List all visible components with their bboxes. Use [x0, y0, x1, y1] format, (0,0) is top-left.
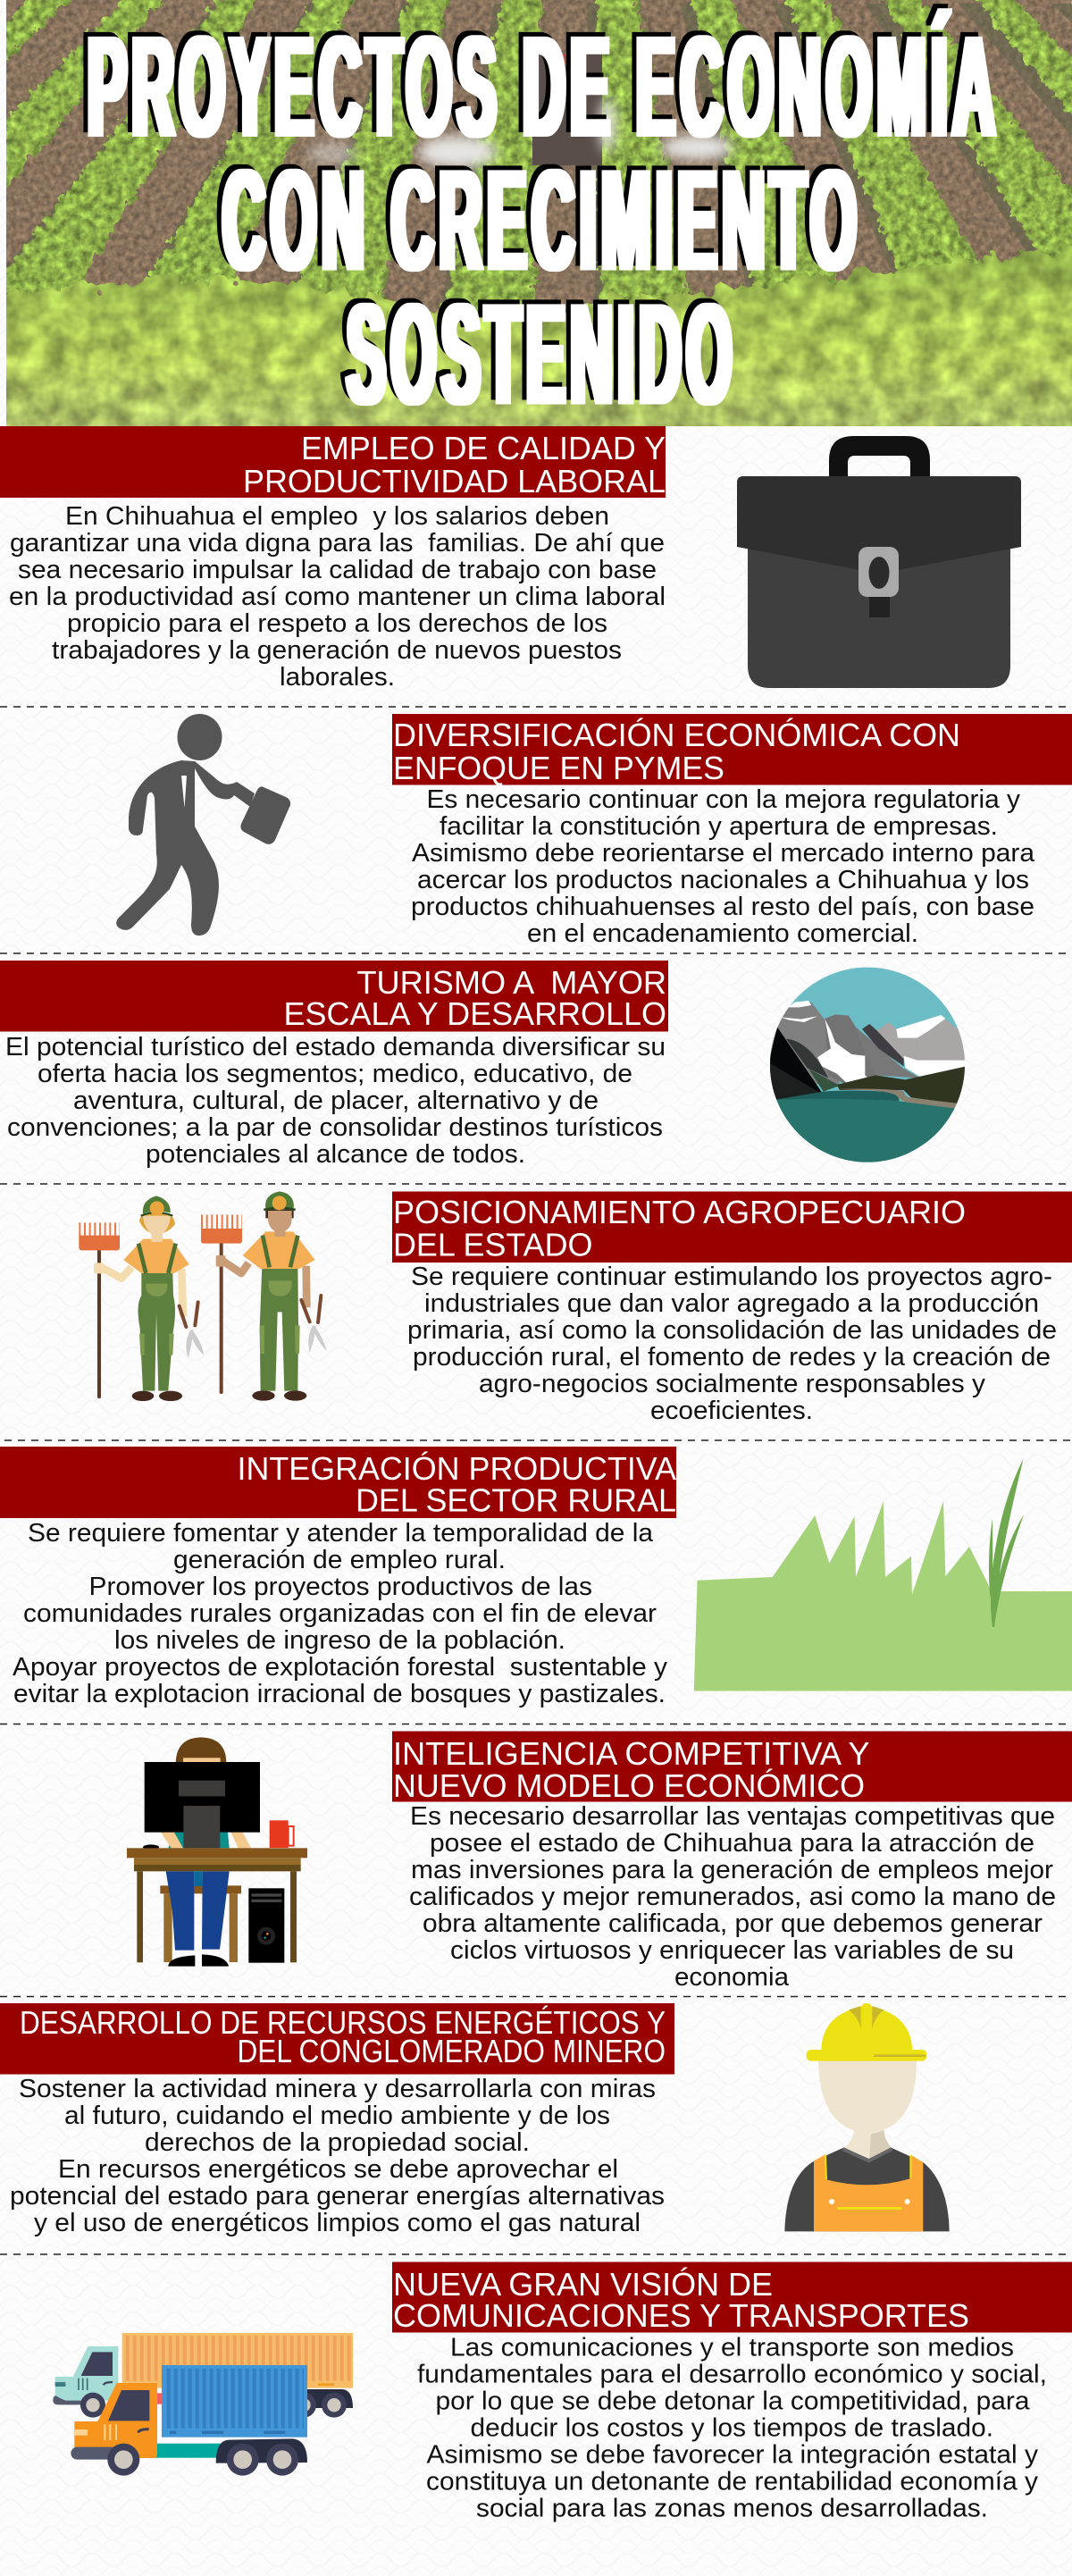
- icon: worker with yellow helmet: [784, 2003, 950, 2231]
- text block: comunicaciones y transportes: [417, 2334, 1047, 2523]
- text block: recursos energéticos y minero: [10, 2075, 665, 2237]
- text block: diversificación económica: acercar los productos nacionales a Chihuahua y los: [417, 866, 1029, 894]
- panel: comunicaciones y transportes: [53, 2262, 1072, 2523]
- text block: inteligencia competitiva: economia: [674, 1963, 790, 1992]
- text block: empleo de calidad: propicio para el respeto a los derechos de los: [67, 609, 607, 638]
- heading: comunicaciones y transportes: [392, 2262, 1072, 2334]
- text block: empleo de calidad: garantizar una vida digna para las familias. De ahí que: [10, 529, 665, 558]
- panel: recursos energéticos y minero: [0, 2003, 950, 2237]
- icon: briefcase: [737, 436, 1021, 688]
- icon: two container trucks: [53, 2333, 353, 2476]
- heading: empleo de calidad: EMPLEO DE CALIDAD Y: [301, 430, 666, 466]
- heading: comunicaciones y transportes: NUEVA GRAN VISIÓN DE: [393, 2266, 773, 2303]
- text block: empleo de calidad: laborales.: [280, 663, 395, 692]
- text block: recursos energéticos y minero: En recursos energéticos se debe aprovechar el: [58, 2155, 618, 2184]
- icon: person at computer desk: [127, 1737, 307, 1967]
- panel: empleo de calidad: [0, 426, 1021, 692]
- text block: diversificación económica: facilitar la constitución y apertura de empresas.: [440, 812, 998, 841]
- panel: turismo: [0, 961, 971, 1169]
- text block: integración productiva: los niveles de ingreso de la población.: [114, 1626, 565, 1655]
- text block: inteligencia competitiva: mas inversiones para la generación de empleos mejor: [411, 1856, 1053, 1884]
- text block: integración productiva: Apoyar proyectos de explotación forestal sustentable y: [13, 1653, 668, 1682]
- text block: posicionamiento agropecuario: ecoeficientes.: [650, 1397, 813, 1425]
- text block: integración productiva: Promover los proyectos productivos de las: [89, 1573, 592, 1601]
- text block: inteligencia competitiva: obra altamente calificada, por que debemos generar: [423, 1909, 1043, 1938]
- text block: integración productiva: [13, 1519, 668, 1708]
- header photo: vineyard rows with tractor spraying: [0, 0, 1072, 447]
- text block: turismo: convenciones; a la par de consolidar destinos turísticos: [7, 1113, 663, 1142]
- text block: integración productiva: Se requiere fomentar y atender la temporalidad de la: [28, 1519, 654, 1548]
- panel: integración productiva: [0, 1447, 1072, 1708]
- text block: comunicaciones y transportes: fundamentales para el desarrollo económico y social,: [417, 2361, 1047, 2389]
- text block: inteligencia competitiva: [409, 1802, 1056, 1992]
- heading: integración productiva: [0, 1447, 676, 1519]
- heading: recursos energéticos y minero: [0, 2003, 674, 2075]
- heading: turismo: ESCALA Y DESARROLLO: [284, 995, 666, 1032]
- text block: turismo: potenciales al alcance de todos.: [146, 1140, 525, 1169]
- heading: diversificación económica: ENFOQUE EN PYMES: [393, 750, 724, 786]
- text block: empleo de calidad: [9, 502, 666, 692]
- panel: diversificación económica: [116, 714, 1072, 948]
- text block: empleo de calidad: En Chihuahua el empleo y los salarios deben: [65, 502, 609, 531]
- text block: integración productiva: comunidades rurales organizadas con el fin de elevar: [23, 1599, 657, 1628]
- icon: two farmers with rakes and shears: [79, 1191, 327, 1401]
- text block: comunicaciones y transportes: Asimismo se debe favorecer la integración estatal y: [427, 2441, 1039, 2470]
- text block: diversificación económica: Es necesario continuar con la mejora regulatoria y: [427, 785, 1021, 814]
- heading: integración productiva: DEL SECTOR RURAL: [356, 1481, 676, 1519]
- text block: diversificación económica: productos chihuahuenses al resto del país, con base: [411, 893, 1034, 921]
- title: [88, 6, 1001, 434]
- text block: recursos energéticos y minero: al futuro, cuidando el medio ambiente y de los: [64, 2102, 610, 2130]
- text block: turismo: El potencial turístico del estado demanda diversificar su: [5, 1033, 666, 1061]
- text block: turismo: aventura, cultural, de placer, alternativo y de: [73, 1087, 599, 1115]
- text block: comunicaciones y transportes: social para las zonas menos desarrolladas.: [476, 2495, 988, 2523]
- text block: inteligencia competitiva: Es necesario desarrollar las ventajas competitivas que: [410, 1802, 1055, 1831]
- text block: diversificación económica: en el encadenamiento comercial.: [527, 919, 918, 948]
- icon: mountain lake circle: [766, 965, 971, 1168]
- heading: turismo: TURISMO A MAYOR: [357, 964, 666, 1001]
- text block: comunicaciones y transportes: Las comunicaciones y el transporte son medios: [450, 2334, 1014, 2362]
- text block: recursos energéticos y minero: derechos de la propiedad social.: [145, 2128, 530, 2157]
- text block: turismo: oferta hacia los segmentos; medico, educativo, de: [38, 1060, 632, 1088]
- heading: inteligencia competitiva: NUEVO MODELO ECONÓMICO: [393, 1767, 865, 1804]
- heading: inteligencia competitiva: INTELIGENCIA COMPETITIVA Y: [393, 1735, 870, 1772]
- text block: empleo de calidad: sea necesario impulsar la calidad de trabajo con base: [18, 556, 657, 584]
- panel: posicionamiento agropecuario: [79, 1191, 1072, 1425]
- heading: recursos energéticos y minero: DEL CONGLOMERADO MINERO: [238, 2033, 666, 2069]
- heading: turismo: [0, 961, 668, 1032]
- text block: posicionamiento agropecuario: producción rural, el fomento de redes y la creación de: [413, 1343, 1051, 1372]
- heading: posicionamiento agropecuario: DEL ESTADO: [393, 1226, 593, 1263]
- heading: empleo de calidad: [0, 426, 666, 499]
- text block: integración productiva: generación de empleo rural.: [173, 1546, 506, 1574]
- text block: recursos energéticos y minero: potencial del estado para generar energías alternativas: [10, 2182, 665, 2211]
- heading: comunicaciones y transportes: COMUNICACIONES Y TRANSPORTES: [393, 2297, 969, 2334]
- text block: posicionamiento agropecuario: Se requiere continuar estimulando los proyectos agro-: [411, 1263, 1052, 1291]
- icon: walking businessman: [116, 714, 290, 936]
- text block: comunicaciones y transportes: deducir los costos y los tiempos de traslado.: [470, 2414, 993, 2443]
- text block: inteligencia competitiva: ciclos virtuosos y enriquecer las variables de su: [450, 1936, 1014, 1965]
- text block: integración productiva: evitar la explotacion irracional de bosques y pastizales.: [13, 1680, 666, 1708]
- text block: empleo de calidad: en la productividad así como mantener un clima laboral: [9, 583, 666, 611]
- text block: posicionamiento agropecuario: primaria, así como la consolidación de las unidades de: [407, 1316, 1057, 1345]
- heading: recursos energéticos y minero: DESARROLLO DE RECURSOS ENERGÉTICOS Y: [20, 2004, 666, 2041]
- text block: recursos energéticos y minero: Sostener la actividad minera y desarrollarla con miras: [19, 2075, 656, 2103]
- heading: diversificación económica: [392, 714, 1072, 786]
- heading: empleo de calidad: PRODUCTIVIDAD LABORAL: [243, 463, 666, 499]
- text block: comunicaciones y transportes: por lo que se debe detonar la competitividad, para: [436, 2387, 1030, 2416]
- text block: inteligencia competitiva: posee el estado de Chihuahua para la atracción de: [430, 1829, 1034, 1858]
- heading: diversificación económica: DIVERSIFICACIÓN ECONÓMICA CON: [393, 717, 960, 753]
- text block: posicionamiento agropecuario: agro-negocios socialmente responsables y: [479, 1370, 986, 1398]
- text block: diversificación económica: [411, 785, 1035, 948]
- heading: posicionamiento agropecuario: [392, 1192, 1072, 1263]
- panel: inteligencia competitiva: [127, 1732, 1072, 1992]
- text block: posicionamiento agropecuario: industriales que dan valor agregado a la producción: [424, 1289, 1039, 1318]
- text block: inteligencia competitiva: calificados y mejor remunerados, asi como la mano de: [409, 1883, 1056, 1911]
- text block: recursos energéticos y minero: y el uso de energéticos limpios como el gas natural: [34, 2209, 641, 2237]
- text block: comunicaciones y transportes: constituya un detonante de rentabilidad economía y: [426, 2468, 1039, 2496]
- icon: grass: [694, 1459, 1072, 1691]
- text block: empleo de calidad: trabajadores y la generación de nuevos puestos: [52, 636, 622, 665]
- heading: posicionamiento agropecuario: POSICIONAMIENTO AGROPECUARIO: [393, 1194, 966, 1230]
- text block: diversificación económica: Asimismo debe reorientarse el mercado interno para: [412, 839, 1035, 868]
- text block: turismo: [5, 1033, 666, 1169]
- heading: inteligencia competitiva: [392, 1732, 1072, 1804]
- text block: posicionamiento agropecuario: [407, 1263, 1057, 1425]
- heading: integración productiva: INTEGRACIÓN PRODUCTIVA: [238, 1450, 676, 1487]
